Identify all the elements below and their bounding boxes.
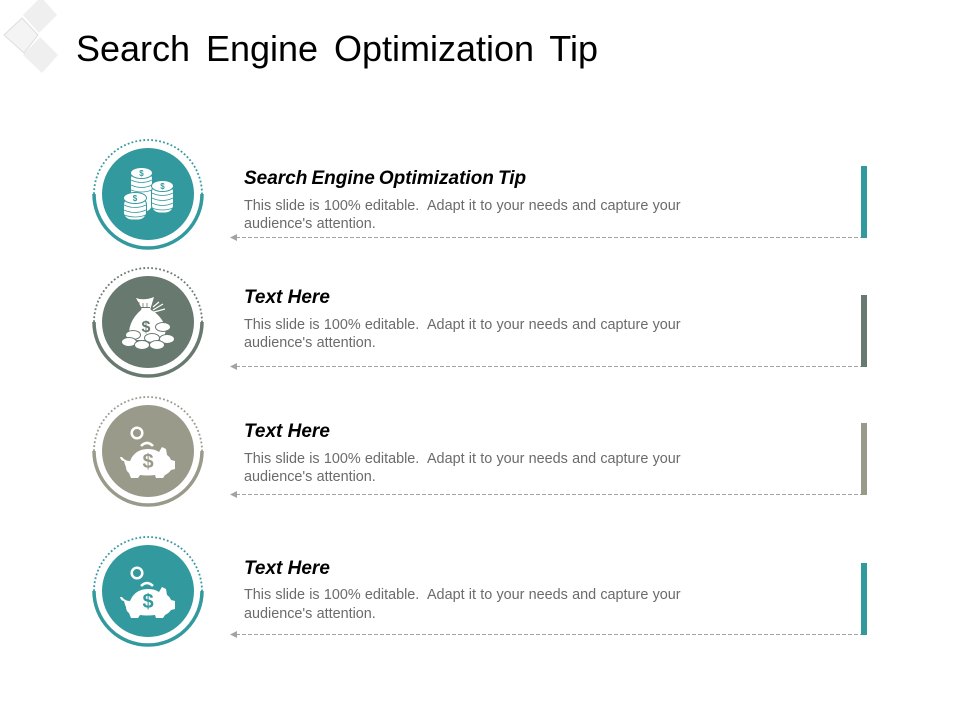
dashed arrow: [230, 631, 861, 638]
icon: coin stacks in teal ring: $: [133, 194, 138, 203]
icon: piggy bank in teal ring: $: [142, 591, 154, 613]
accent bar: [861, 295, 867, 367]
body text: audience's attention.: [244, 335, 376, 351]
panel: row 1: [94, 140, 867, 248]
heading: Text Here: [244, 287, 330, 308]
body text: This slide is 100% editable. Adapt it to your needs and capture your: [244, 198, 681, 214]
body text: audience's attention.: [244, 469, 376, 485]
dashed arrow: [230, 234, 861, 241]
accent bar: [861, 423, 867, 495]
icon: piggy bank in taupe ring: [94, 397, 202, 505]
icon: piggy bank in taupe ring: $: [142, 451, 154, 473]
body text: [244, 587, 681, 622]
body text: This slide is 100% editable. Adapt it to your needs and capture your: [244, 587, 681, 603]
decorative diamonds logo: [4, 0, 58, 73]
heading: Text Here: [244, 558, 330, 579]
body text: [244, 198, 681, 232]
accent bar: [861, 166, 867, 238]
body text: [244, 451, 681, 485]
heading: Text Here: [244, 421, 330, 442]
accent bar: [861, 563, 867, 635]
panel: row 2: [94, 268, 867, 376]
panel: row 4: [94, 537, 867, 645]
dashed arrow: [230, 363, 861, 370]
icon: coin stacks in teal ring: $: [160, 182, 165, 191]
icon: piggy bank in teal ring: [94, 537, 202, 645]
body text: audience's attention.: [244, 216, 376, 232]
body text: audience's attention.: [244, 606, 376, 622]
dashed arrow: [230, 491, 861, 498]
icon: money bag in slate ring: $: [142, 319, 151, 336]
heading: Search Engine Optimization Tip: [244, 168, 526, 189]
icon: money bag in slate ring: [94, 268, 202, 376]
body text: This slide is 100% editable. Adapt it to your needs and capture your: [244, 317, 681, 333]
icon: coin stacks in teal ring: $: [139, 169, 144, 178]
icon: coin stacks in teal ring: [94, 140, 202, 248]
panel: row 3: [94, 397, 867, 505]
body text: [244, 317, 681, 351]
body text: This slide is 100% editable. Adapt it to your needs and capture your: [244, 451, 681, 467]
title: Search Engine Optimization Tip: [76, 28, 598, 69]
